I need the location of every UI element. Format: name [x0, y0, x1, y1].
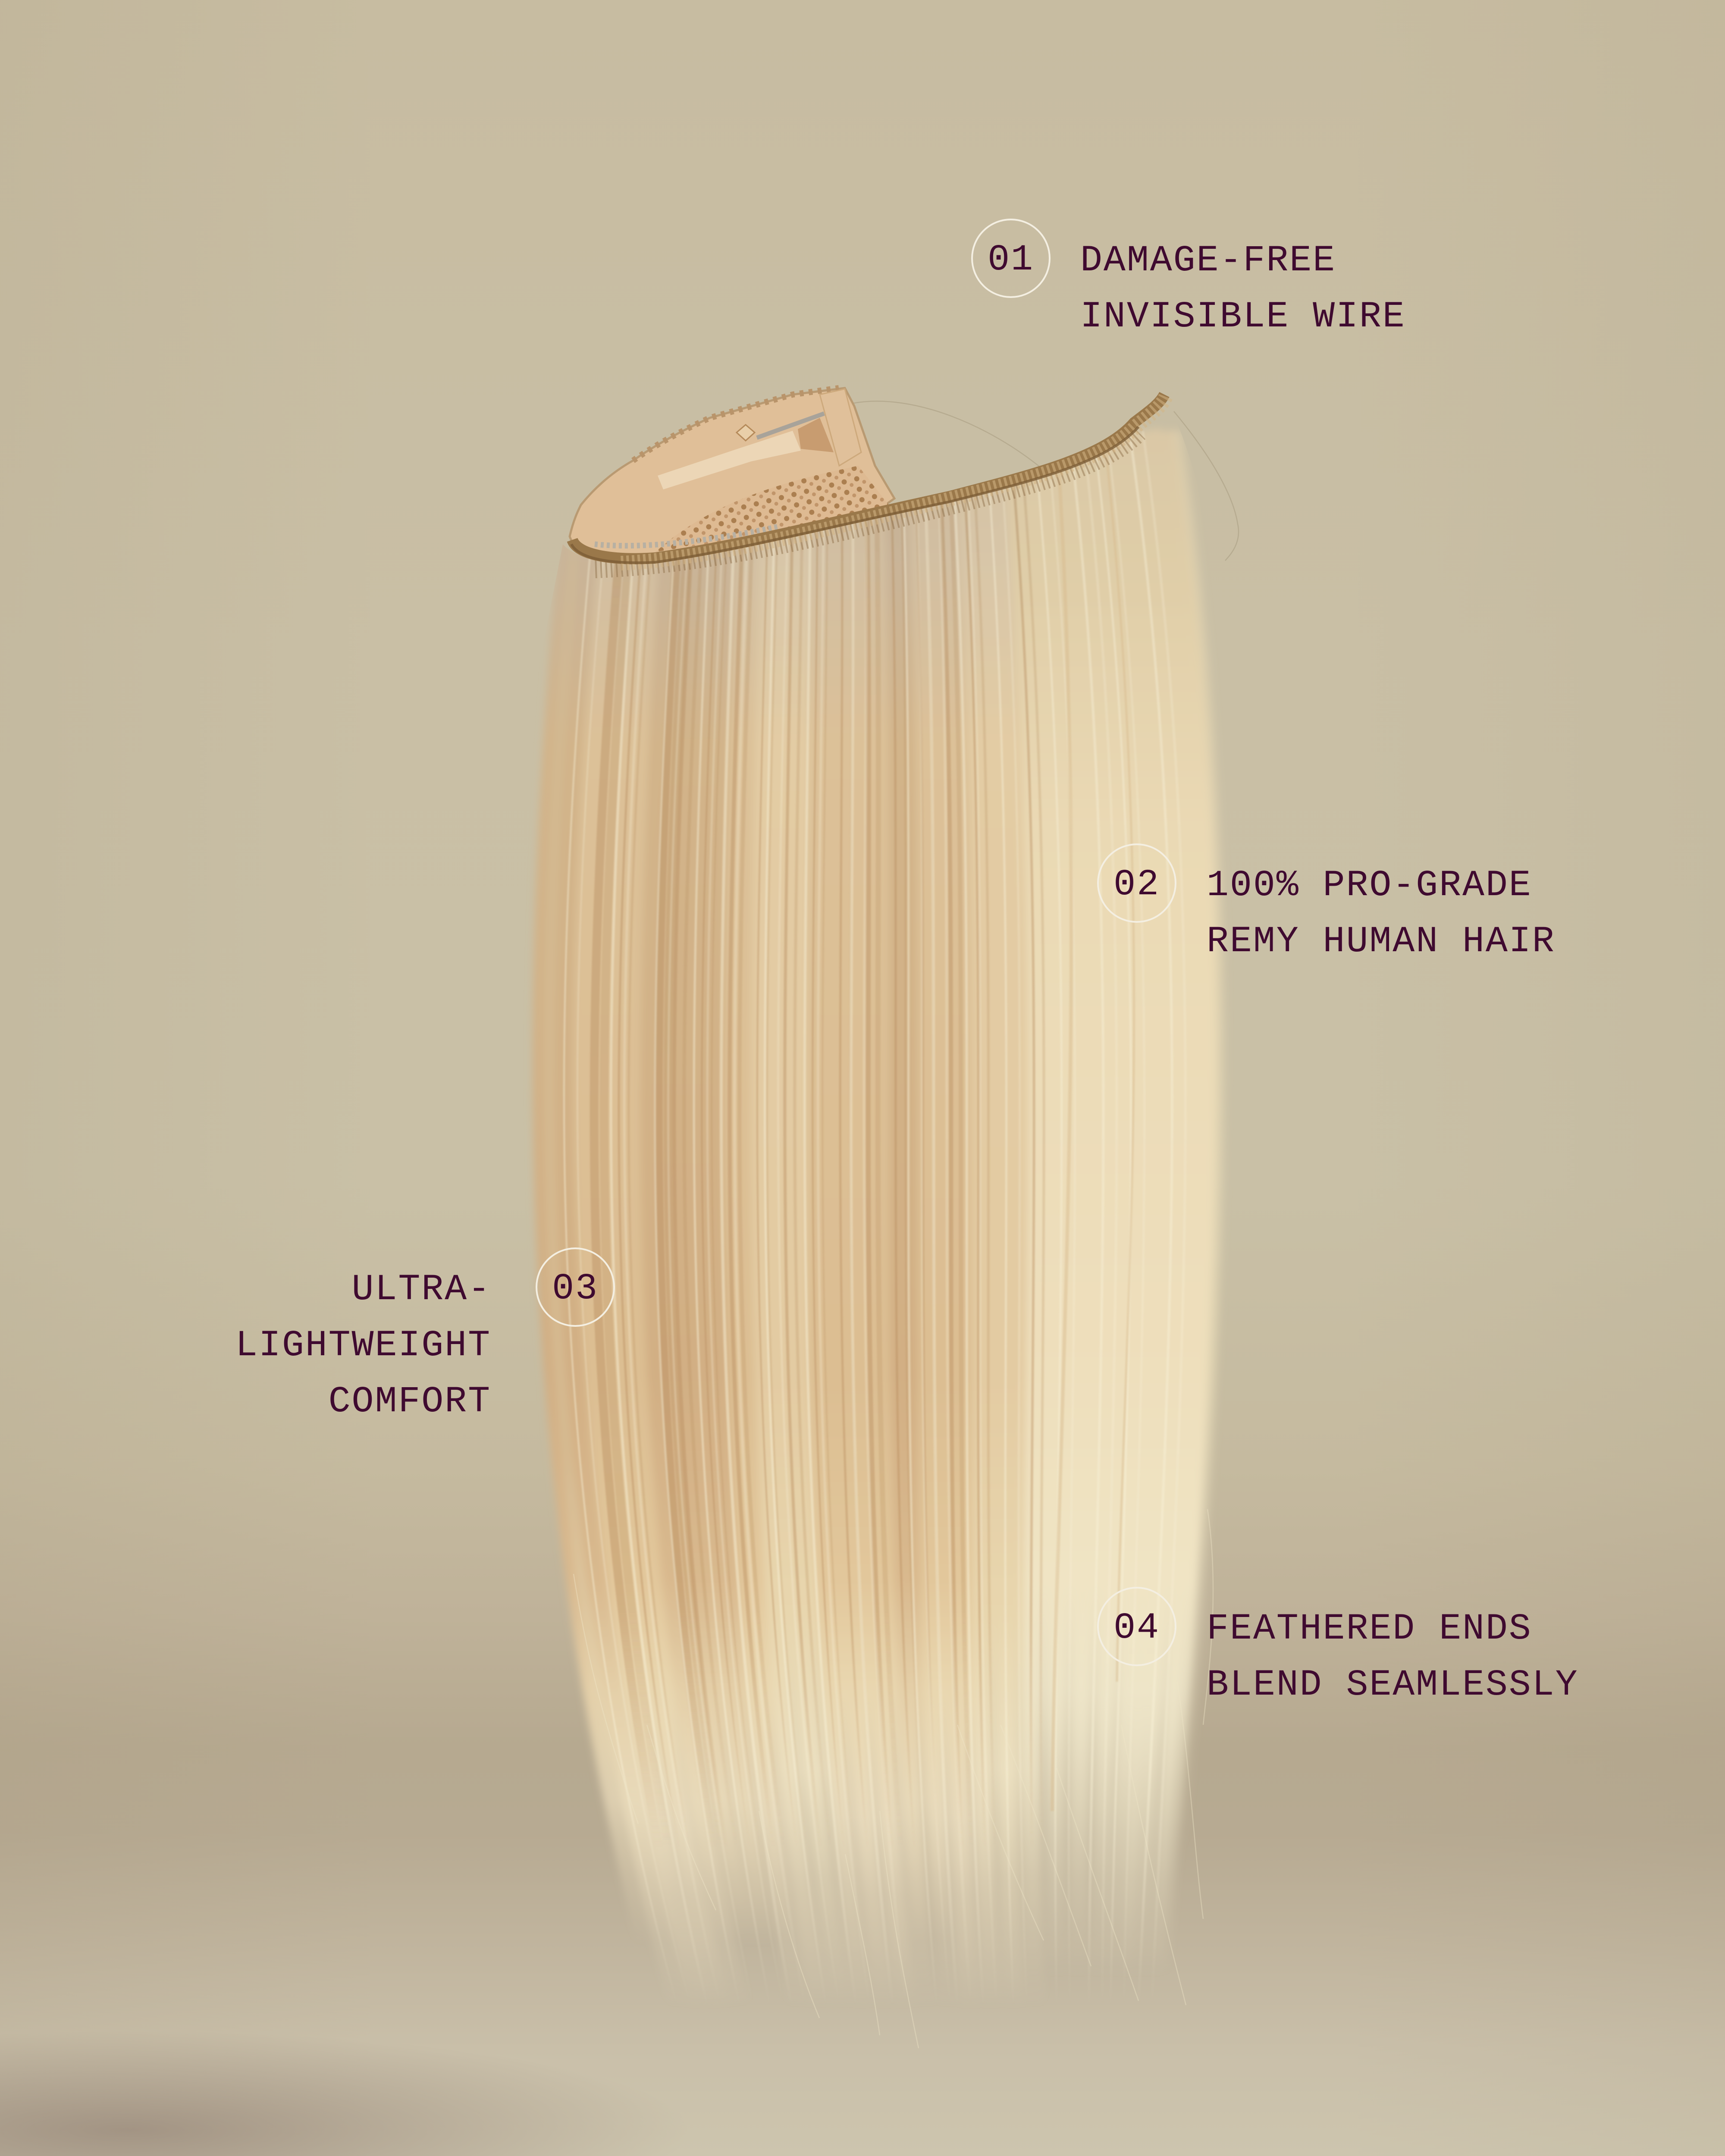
callout 03: [233, 1247, 617, 1429]
loose thin hairs at the top: [853, 401, 1239, 561]
floor shadow: [0, 1940, 733, 2156]
wire cap interior: [570, 388, 894, 561]
hair colour columns: [549, 431, 1220, 2005]
number badge 03: 03: [552, 1268, 599, 1310]
tab shadow: [798, 418, 834, 452]
grey stitching: [595, 526, 779, 546]
number badge 01: 01: [988, 239, 1034, 281]
tan streaks in the pale right half: [1052, 431, 1134, 1811]
lace mesh: [656, 466, 888, 552]
callout 04: [1097, 1587, 1584, 1729]
label: feathered ends blend seamlessly: FEATHERED ENDS BLEND SEAMLESSLY: [1207, 1608, 1579, 1706]
hair body: [549, 431, 1220, 2005]
silicone tab: [820, 389, 861, 466]
clear strap: [658, 431, 801, 489]
repeated fine dark strands: [604, 431, 1045, 2005]
number badge 03: [536, 1247, 615, 1327]
hair extension photo illustration: [530, 385, 1239, 2048]
number badge 02: [1097, 843, 1176, 923]
light strands: [564, 431, 1186, 2005]
number badge 04: [1097, 1587, 1176, 1666]
callout 01: [971, 219, 1411, 361]
dotted cap edge: [633, 388, 839, 461]
label: pro-grade remy human hair: 100% PRO-GRADE REMY HUMAN HAIR: [1207, 865, 1556, 962]
fine flyaway strands at the ends: [574, 1509, 1213, 2048]
cap base: [570, 388, 894, 561]
stitched weft seam: [571, 395, 1166, 568]
repeated fine light strands: [577, 431, 1186, 2005]
label: damage-free invisible wire: DAMAGE-FREE INVISIBLE WIRE: [1080, 240, 1406, 338]
number badge 01: [971, 219, 1051, 298]
number badge 02: 02: [1113, 864, 1160, 906]
number badge 04: 04: [1113, 1607, 1160, 1649]
wire clip: [757, 414, 824, 438]
label: ultra-lightweight comfort: ULTRA- LIGHTWEIGHT COMFORT: [235, 1269, 491, 1423]
dark strands: [590, 484, 1045, 1814]
comb of stitched hair below the seam: [595, 432, 1138, 568]
callout 02: [1097, 843, 1563, 986]
